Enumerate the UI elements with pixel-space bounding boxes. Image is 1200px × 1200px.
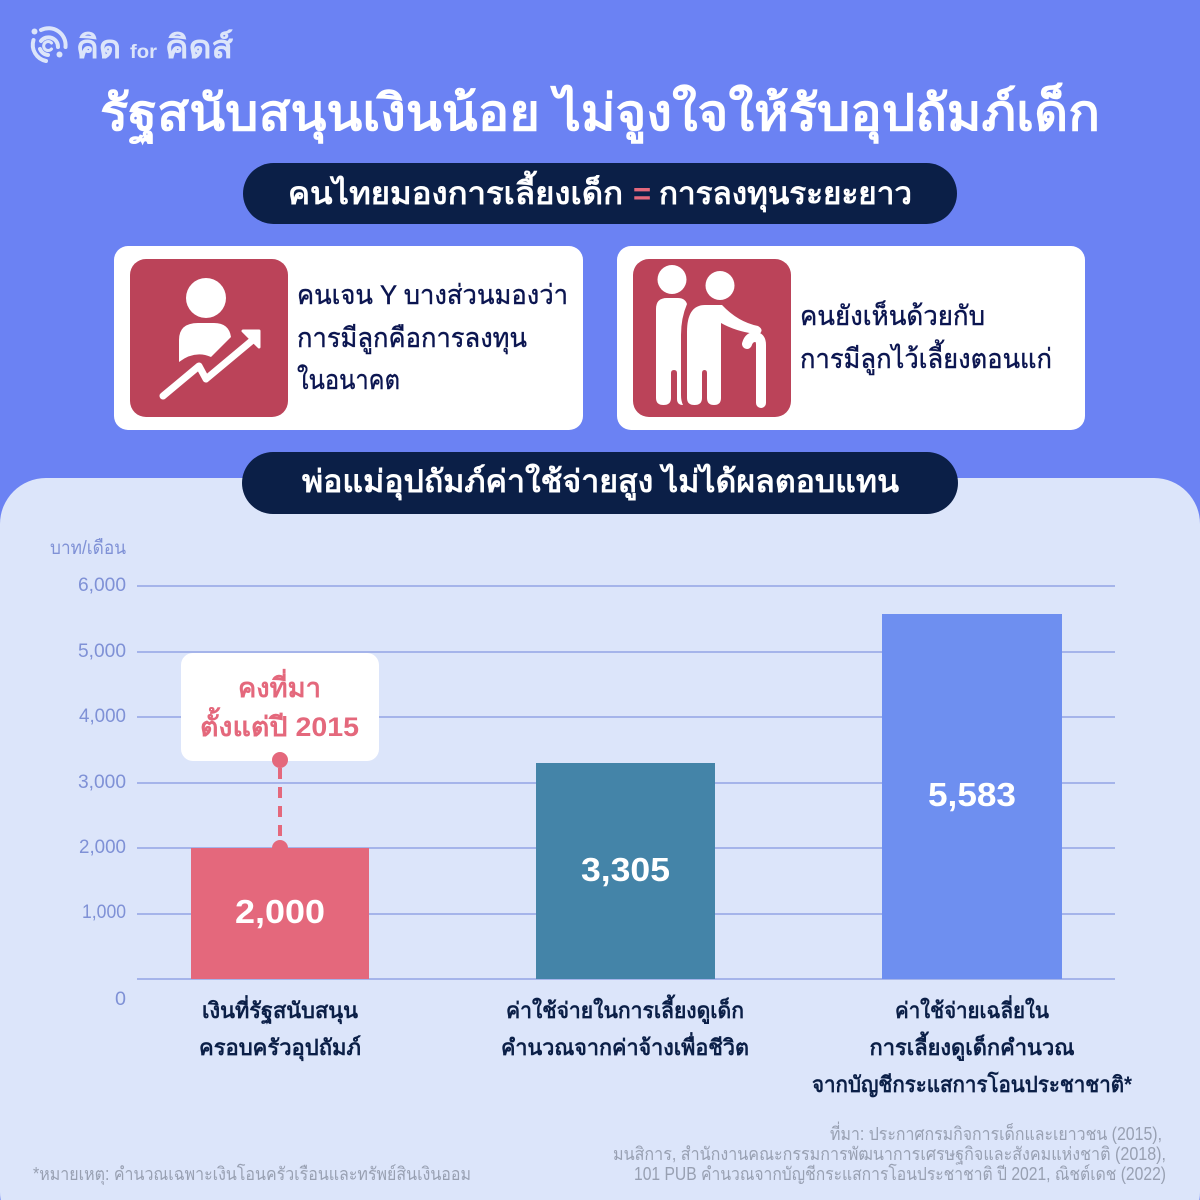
icon: elderly couple with cane <box>633 259 791 417</box>
y axis labels: 1,000 <box>82 902 126 923</box>
heading pill: high cost: พ่อแม่อุปถัมภ์ค่าใช้จ่ายสูง ไม่ได้ผลตอบแทน <box>302 463 899 501</box>
heading pill: long-term investment: คนไทยมองการเลี้ยงเด็ก <box>288 170 623 211</box>
source: ที่มา: ประกาศกรมกิจการเด็กและเยาวชน (2015), <box>830 1121 1162 1144</box>
heading pill: long-term investment: การลงทุนระยะยาว <box>659 176 912 213</box>
bar chart <box>50 538 1115 1010</box>
y axis labels: 4,000 <box>79 706 126 727</box>
logo: คิด for คิดส์: คิด <box>76 29 121 65</box>
heading pill: long-term investment <box>243 163 957 224</box>
y axis labels: 6,000 <box>78 575 126 596</box>
source <box>613 1121 1166 1184</box>
callout marker: lower dot <box>272 840 288 856</box>
text: Gen Y view: การมีลูกคือการลงทุน <box>297 323 527 355</box>
text: Gen Y view: คนเจน Y บางส่วนมองว่า <box>297 280 568 310</box>
category labels: ค่าใช้จ่ายเฉลี่ยใน <box>895 994 1049 1023</box>
bar: 2,000: 2,000 <box>235 893 325 930</box>
heading pill: high cost <box>242 452 958 514</box>
text: old age view: คนยังเห็นด้วยกับ <box>800 298 985 331</box>
panel: old age card <box>617 246 1085 430</box>
y axis labels: 0 <box>115 989 126 1010</box>
category labels: ค่าใช้จ่ายในการเลี้ยงดูเด็ก <box>506 994 744 1025</box>
callout: constant since 2015 <box>181 653 379 842</box>
logo: คิด for คิดส์: for <box>130 42 158 63</box>
bar: 5,583 <box>882 614 1062 979</box>
footnote: *หมายเหตุ: คำนวณเฉพาะเงินโอนครัวเรือนและทรัพย์สินเงินออม <box>33 1163 471 1185</box>
title: รัฐสนับสนุนเงินน้อย ไม่จูงใจให้รับอุปถัมภ์เด็ก <box>100 82 1100 145</box>
y axis labels: 5,000 <box>78 641 126 662</box>
icon: person with rising arrow <box>130 259 288 417</box>
y axis labels <box>50 538 126 1010</box>
logo: คิด for คิดส์ <box>32 28 234 65</box>
bar: 5,583: 5,583 <box>928 776 1016 813</box>
category labels <box>199 994 1132 1098</box>
panel: chart background <box>0 478 1200 1200</box>
callout: constant since 2015: ตั้งแต่ปี 2015 <box>200 706 359 742</box>
category labels: ครอบครัวอุปถัมภ์ <box>199 1035 361 1062</box>
y axis labels: บาท/เดือน <box>50 538 126 559</box>
text: Gen Y view: ในอนาคต <box>297 364 400 395</box>
panel: Gen Y card <box>114 246 583 430</box>
category labels: การเลี้ยงดูเด็กคำนวณ <box>870 1031 1074 1062</box>
y axis labels: 2,000 <box>79 837 126 858</box>
logo: คิด for คิดส์: คิดส์ <box>165 29 234 65</box>
category labels: จากบัญชีกระแสการโอนประชาชาติ* <box>812 1071 1132 1098</box>
text: old age view: การมีลูกไว้เลี้ยงตอนแก่ <box>800 339 1052 375</box>
text: old age view <box>800 298 1052 375</box>
callout: constant since 2015: คงที่มา <box>238 668 321 703</box>
category labels: เงินที่รัฐสนับสนุน <box>202 994 358 1025</box>
text: Gen Y view <box>297 280 568 395</box>
bar: 3,305 <box>536 763 715 979</box>
heading pill: long-term investment: = <box>633 176 651 211</box>
bar: 3,305: 3,305 <box>581 851 670 888</box>
category labels: คำนวณจากค่าจ้างเพื่อชีวิต <box>501 1031 749 1060</box>
y axis labels: 3,000 <box>78 772 126 793</box>
bar: 2,000 <box>191 848 369 979</box>
